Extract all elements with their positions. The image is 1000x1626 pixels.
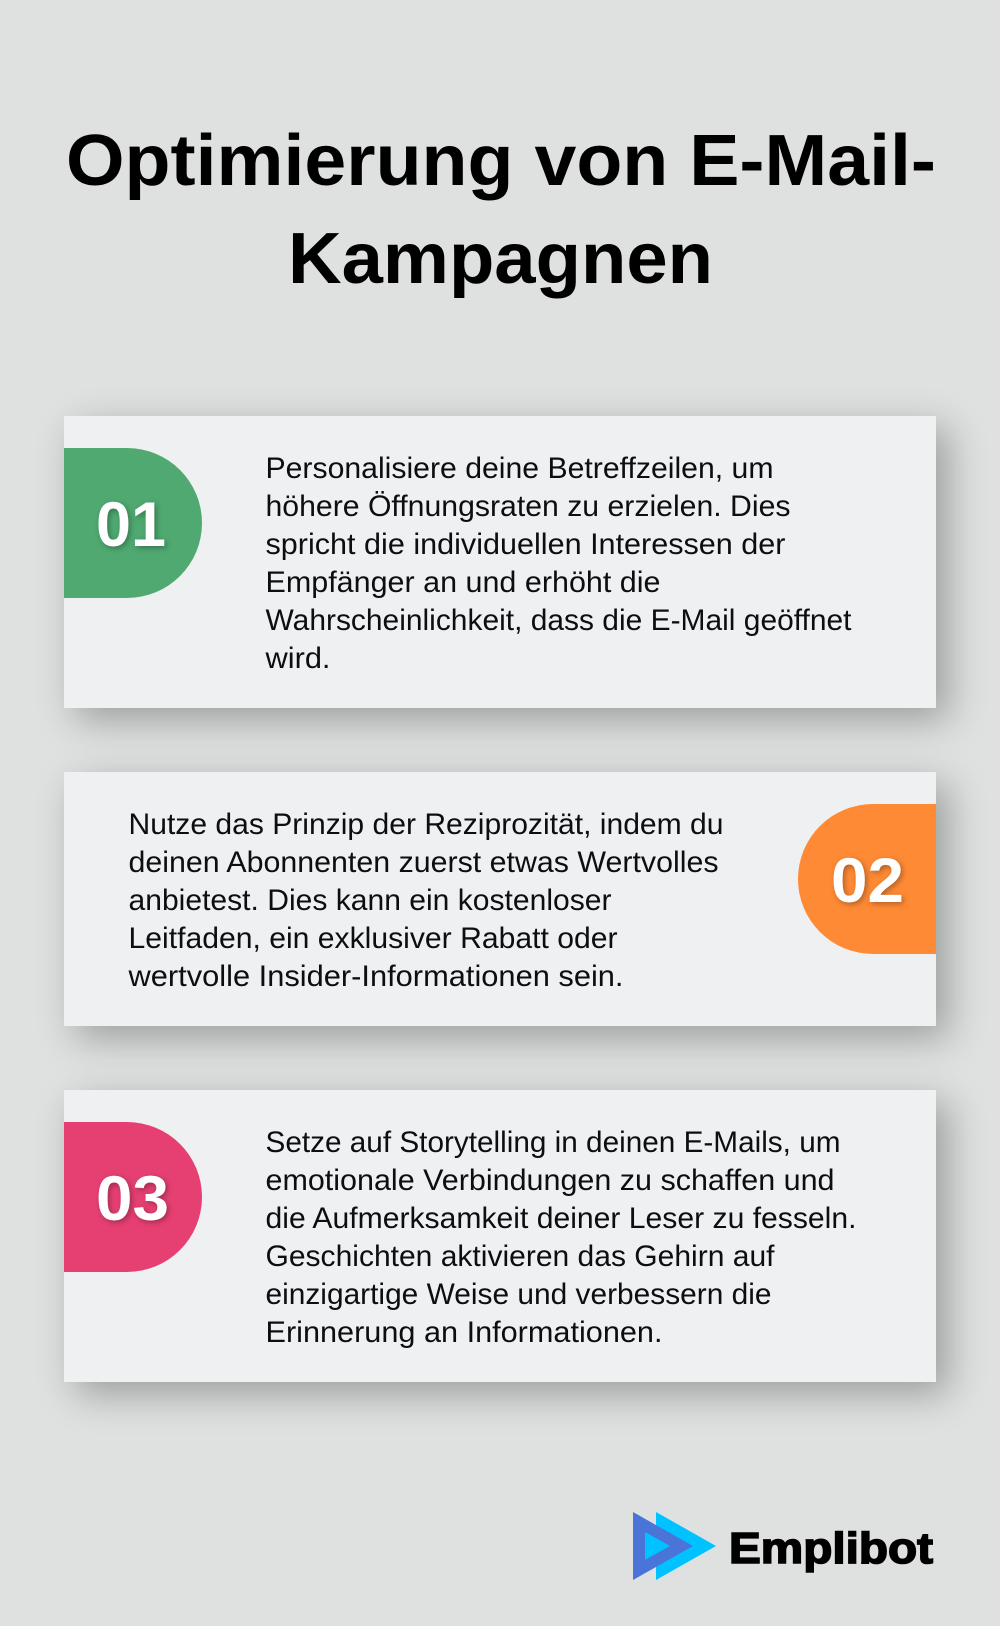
badge: 03: 03 — [96, 1164, 169, 1234]
text: step 03 description: Erinnerung an Informationen. — [266, 1316, 662, 1349]
text: step 01 description: Wahrscheinlichkeit, dass die E-Mail geöffnet — [266, 604, 852, 637]
text: step 01 description — [264, 452, 852, 675]
text: step 02 description: Leitfaden, ein exklusiver Rabatt oder — [128, 922, 618, 955]
wordmark: Emplibot — [729, 1524, 933, 1573]
title: Optimierung von E-Mail- — [66, 121, 936, 201]
text: step 02 description — [127, 808, 724, 993]
badge: 01 — [64, 448, 202, 598]
text: step 02 description: Nutze das Prinzip der Reziprozität, indem du — [128, 808, 724, 841]
icon: play triangles — [633, 1512, 716, 1580]
text: step 01 description: spricht die individuellen Interessen der — [266, 528, 786, 561]
badge: 03 — [64, 1122, 202, 1272]
title — [66, 121, 936, 299]
badge: 02: 02 — [831, 846, 904, 916]
text: step 01 description: Personalisiere deine Betreffzeilen, um — [266, 452, 774, 485]
text: step 01 description: Empfänger an und erhöht die — [266, 566, 660, 599]
badge: 02 — [798, 804, 936, 954]
badge: 01: 01 — [96, 490, 166, 560]
panel: step 02 — [64, 772, 936, 1026]
text: step 03 description: Geschichten aktivieren das Gehirn auf — [266, 1240, 775, 1273]
text: step 02 description: anbietest. Dies kann ein kostenloser — [128, 884, 612, 917]
text: step 01 description: wird. — [264, 642, 330, 675]
panel: step 03 — [64, 1090, 936, 1382]
text: step 03 description: Setze auf Storytelling in deinen E-Mails, um — [266, 1126, 840, 1159]
text: step 03 description: die Aufmerksamkeit deiner Leser zu fesseln. — [266, 1202, 856, 1235]
panel: step 01 — [64, 416, 936, 708]
text: step 02 description: wertvolle Insider-Informationen sein. — [127, 960, 624, 993]
text: step 03 description — [266, 1126, 856, 1349]
text: step 02 description: deinen Abonnenten zuerst etwas Wertvolles — [128, 846, 718, 879]
text: step 03 description: emotionale Verbindungen zu schaffen und — [266, 1164, 834, 1197]
text: step 01 description: höhere Öffnungsraten zu erzielen. Dies — [266, 490, 790, 523]
title: Kampagnen — [288, 219, 713, 299]
text: step 03 description: einzigartige Weise und verbessern die — [266, 1278, 772, 1311]
